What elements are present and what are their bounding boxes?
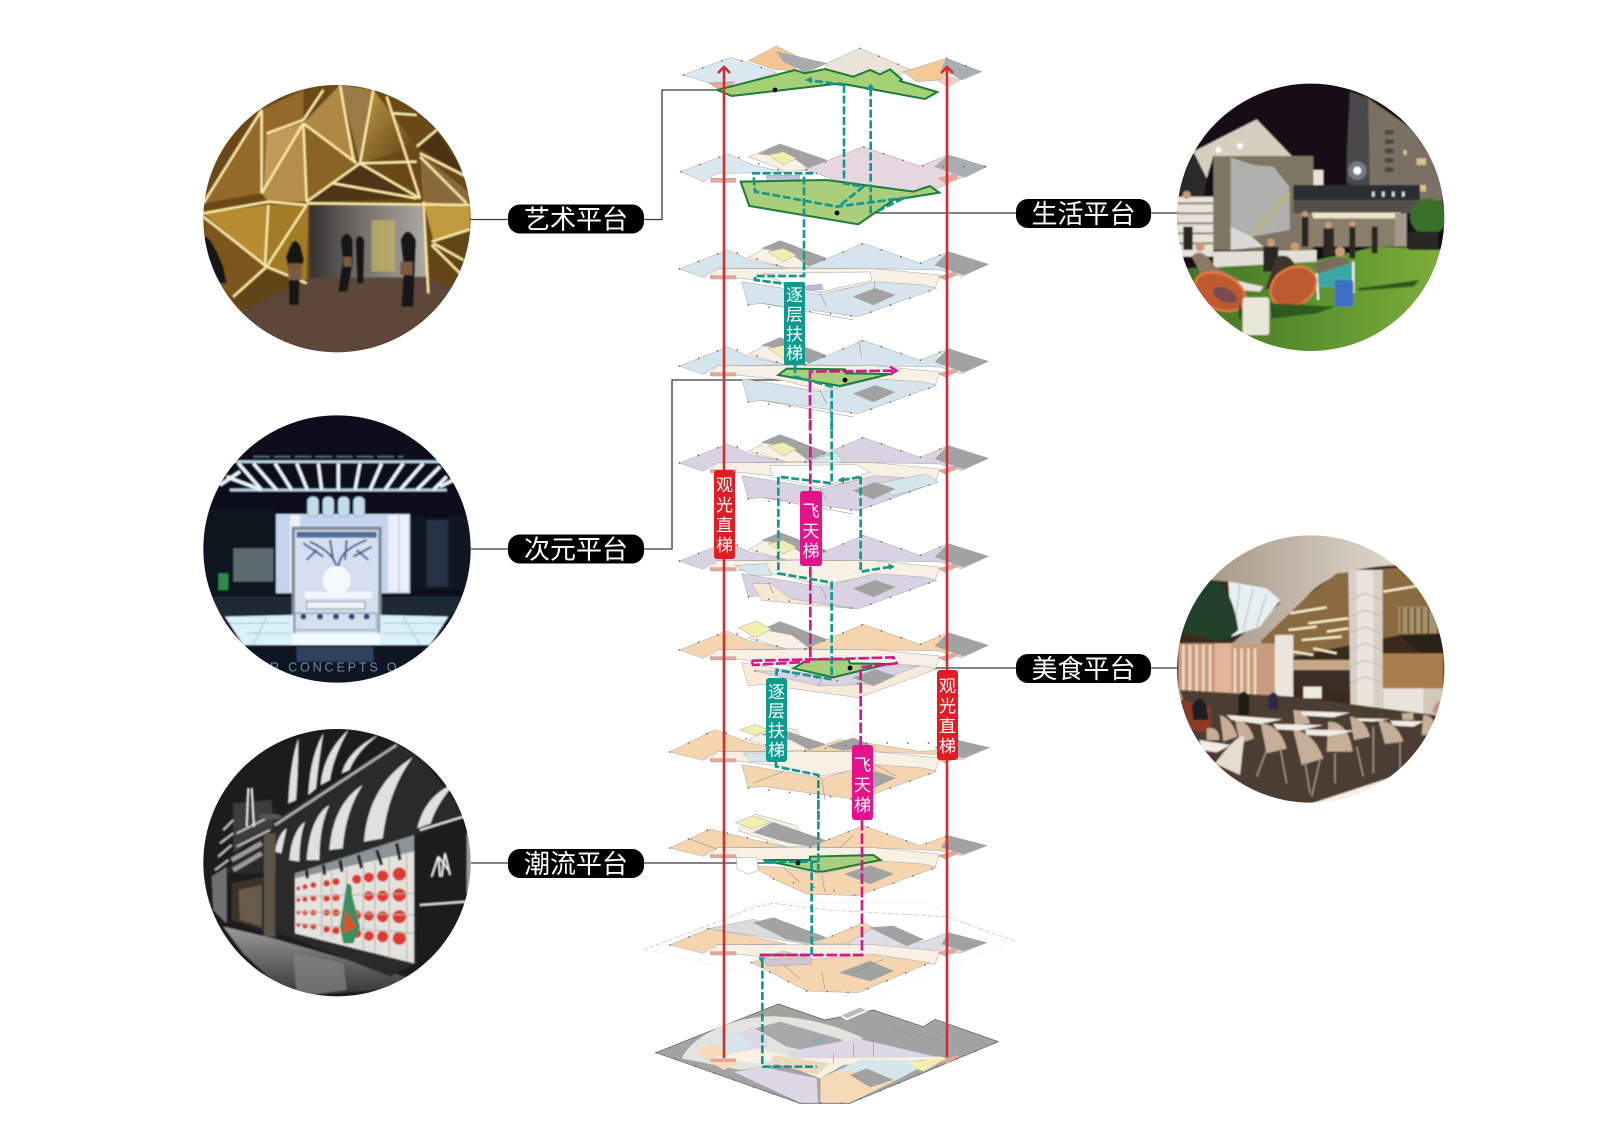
green platform: art level [717,69,937,99]
floor 2: pink level [681,144,987,192]
floor 7: food level [679,621,988,698]
label: right sightseeing lift [937,670,958,760]
sightseeing lift: left red line [718,67,730,1058]
label: right sightseeing lift: 梯 [939,737,956,756]
floor 4: blue level with green platform [679,338,988,417]
photo: night lawn terrace [1177,84,1444,351]
label: left sightseeing lift: 光 [716,496,733,515]
label: upper sky lift [800,491,822,566]
floor 8: orange level [670,725,990,800]
escalator route: upper teal dashes [753,77,907,430]
escalator route: middle teal dashes [776,420,895,820]
photo: blue light installation [203,415,471,683]
floor 10: entrance level [643,903,1017,999]
floor 9: fashion level [670,814,987,896]
label: upper sky lift: 天 [802,522,820,541]
green platform: dimension level [778,369,890,386]
label: upper escalator: 梯 [786,344,803,363]
floor 5: lavender level [679,435,988,514]
stacked floor plans [643,46,1017,1103]
label: right sightseeing lift: 光 [939,697,956,716]
leader dots [773,88,852,865]
label: upper escalator: 层 [786,306,803,324]
floor 3: blue level [679,241,988,320]
photo: food court interior [1177,535,1444,803]
green platform: fashion level [763,855,881,872]
green platform: food level [793,659,888,677]
label: lower escalator: 层 [768,702,785,721]
escalator route: lower teal dashes [758,800,818,1067]
floor 6: lavender level [679,533,988,609]
leader lines [461,90,1177,863]
label: left sightseeing lift: 梯 [716,536,733,555]
label: lower escalator [766,678,787,762]
label: lower escalator: 扶 [768,722,785,740]
label: lower sky lift [852,745,873,820]
floor 11: ground level [656,1004,998,1103]
pill: dimension platform: 次元平台 [524,534,628,564]
label: right sightseeing lift: 直 [939,717,956,736]
photo: black marble storefront [203,729,471,996]
label: lower sky lift: 天 [854,776,871,795]
photo: art installation [203,85,471,352]
label: upper sky lift: 飞 [802,502,820,521]
pill: art platform: 艺术平台 [524,204,628,234]
label: left sightseeing lift: 观 [716,476,733,495]
label: left sightseeing lift [714,470,735,559]
label: right sightseeing lift: 观 [939,677,956,696]
pill: life platform: 生活平台 [1031,199,1136,229]
label: upper escalator [784,282,805,365]
label: upper sky lift: 梯 [802,542,820,561]
label: lower escalator: 逐 [768,683,785,702]
label: upper escalator: 逐 [786,286,803,305]
pill: fashion platform: 潮流平台 [524,849,628,879]
label: lower sky lift: 飞 [854,756,871,775]
sky lift route: magenta dashes [752,367,897,955]
photo: blue light installation: R CONCEPTS O [270,661,397,675]
label: lower escalator: 梯 [768,741,785,760]
label: left sightseeing lift: 直 [716,516,733,535]
label: upper escalator: 扶 [786,325,803,344]
floor 1: roof level [683,46,982,90]
sightseeing lift: right red line [941,67,953,1057]
green platform: life level [741,180,939,224]
pill: food platform: 美食平台 [1031,654,1136,684]
label: lower sky lift: 梯 [854,796,871,815]
